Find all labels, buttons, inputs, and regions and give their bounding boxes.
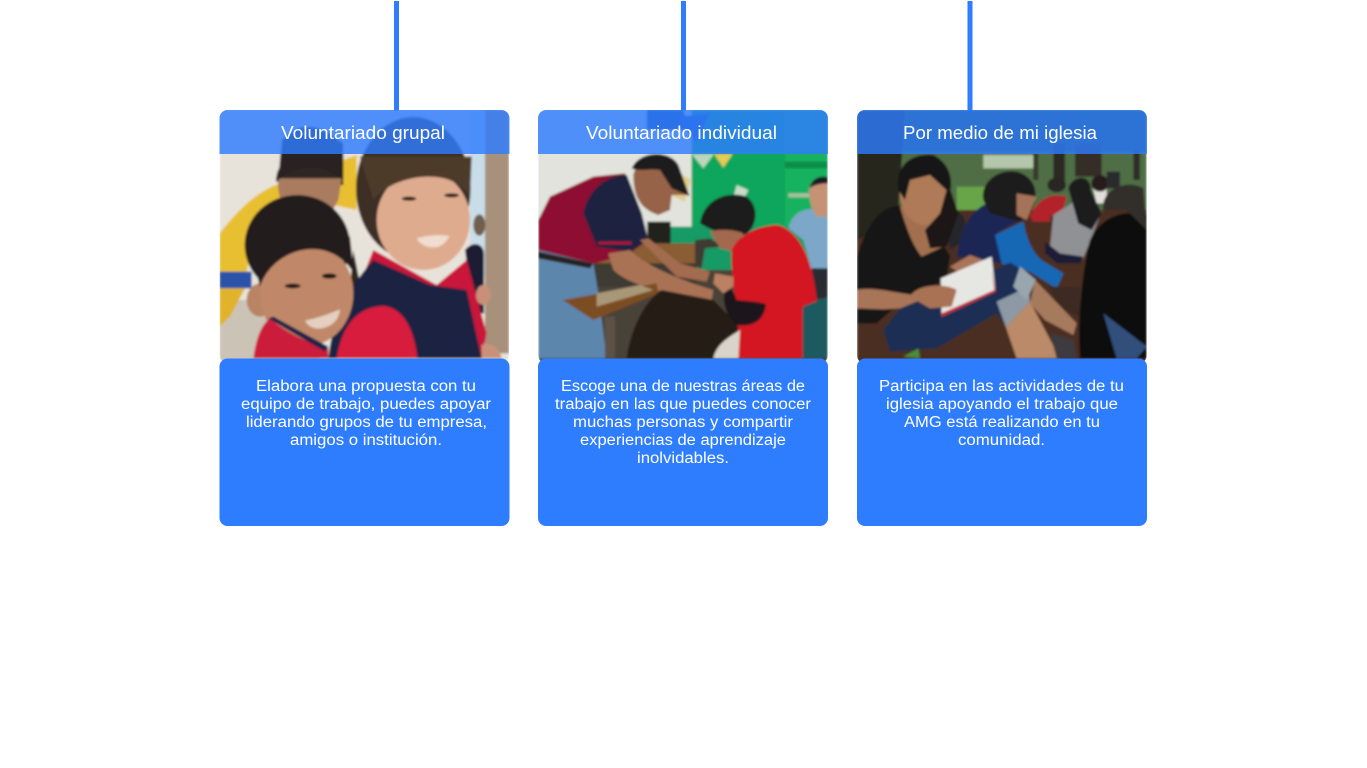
- connector line 3: [968, 1, 972, 111]
- connector line 1: [394, 1, 399, 111]
- description: Voluntariado individual: muchas personas y compartir: [573, 414, 793, 431]
- header: Voluntariado grupal: [220, 110, 510, 154]
- panel: voluntariado grupal: [220, 110, 510, 526]
- description: Voluntariado grupal: Elabora una propuesta con tu: [256, 378, 476, 395]
- description: Voluntariado grupal: equipo de trabajo, puedes apoyar: [241, 396, 491, 413]
- panel: voluntariado individual: [538, 110, 828, 526]
- header: Voluntariado individual: [538, 110, 828, 154]
- description: Voluntariado grupal: [220, 358, 510, 526]
- description: Por medio de mi iglesia: Participa en las actividades de tu: [879, 378, 1124, 395]
- description: Voluntariado individual: [538, 358, 828, 526]
- photo: reading in the forest: [857, 110, 1147, 363]
- panel: por medio de mi iglesia: [857, 110, 1147, 526]
- description: Voluntariado grupal: liderando grupos de tu empresa,: [246, 414, 487, 431]
- photo: smiling girls: [220, 110, 509, 363]
- description: Voluntariado grupal: amigos o institución.: [290, 432, 442, 449]
- description: Voluntariado individual: trabajo en las que puedes conocer: [555, 396, 811, 413]
- description: Voluntariado individual: experiencias de aprendizaje: [580, 432, 786, 449]
- header: Por medio de mi iglesia: [857, 110, 1147, 154]
- header: Voluntariado individual: Voluntariado individual: [586, 123, 777, 143]
- description: Voluntariado individual: inolvidables.: [637, 450, 729, 467]
- description: Por medio de mi iglesia: AMG está realizando en tu: [904, 414, 1100, 431]
- connector line 2: [681, 1, 686, 111]
- description: Por medio de mi iglesia: [857, 358, 1147, 526]
- header: Voluntariado grupal: Voluntariado grupal: [281, 123, 445, 143]
- description: Por medio de mi iglesia: comunidad.: [958, 432, 1045, 449]
- description: Voluntariado individual: Escoge una de nuestras áreas de: [561, 378, 805, 395]
- header: Por medio de mi iglesia: Por medio de mi iglesia: [903, 123, 1098, 143]
- description: Por medio de mi iglesia: iglesia apoyando el trabajo que: [886, 396, 1118, 413]
- photo: sewing workshop: [538, 110, 828, 363]
